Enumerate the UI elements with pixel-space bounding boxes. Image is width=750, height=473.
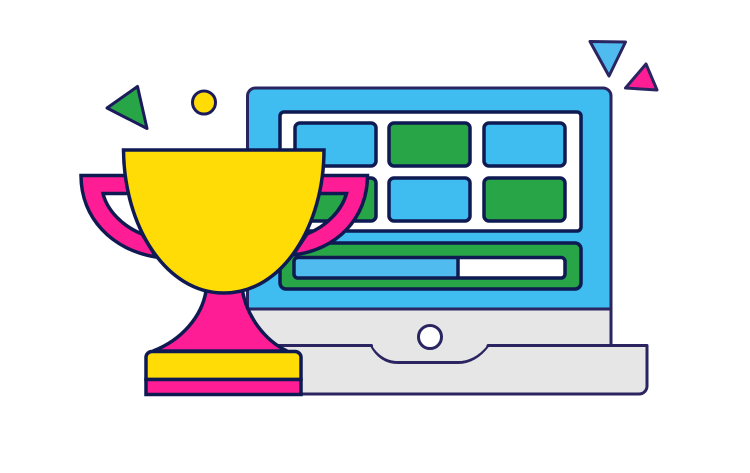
trophy left handle (81, 176, 156, 257)
dashboard tile row 2 column 2 (389, 178, 470, 221)
trophy base pink stripe (146, 380, 301, 394)
green progress panel (280, 243, 581, 289)
laptop hinge section (248, 309, 611, 346)
trophy cup (124, 150, 324, 293)
trophy (81, 150, 368, 394)
dashboard tile row 1 column 1 (295, 123, 376, 166)
trophy right handle (293, 176, 368, 255)
dashboard tile row 2 column 1 (295, 178, 376, 221)
icon: pink triangle (626, 64, 657, 90)
progress bar (294, 258, 565, 278)
laptop webcam button (418, 326, 442, 348)
icon: yellow circle (192, 91, 216, 114)
laptop hinge side edges (248, 309, 611, 346)
icon: green triangle (107, 86, 147, 128)
progress bar outline (294, 258, 565, 278)
laptop notch fill (373, 344, 487, 361)
trophy stem (153, 291, 287, 351)
icon: blue triangle (590, 42, 626, 76)
trophy base yellow block (146, 351, 301, 380)
dashboard tile row 2 column 3 (484, 178, 565, 221)
white dashboard panel (280, 112, 581, 231)
dashboard tile row 1 column 3 (484, 123, 565, 166)
progress bar divider (456, 258, 460, 278)
laptop screen lid (248, 88, 611, 309)
progress bar fill (294, 258, 458, 278)
progress bar track (294, 258, 565, 278)
laptop base (248, 346, 647, 394)
laptop (248, 88, 647, 394)
dashboard tile row 1 column 2 (389, 123, 470, 166)
